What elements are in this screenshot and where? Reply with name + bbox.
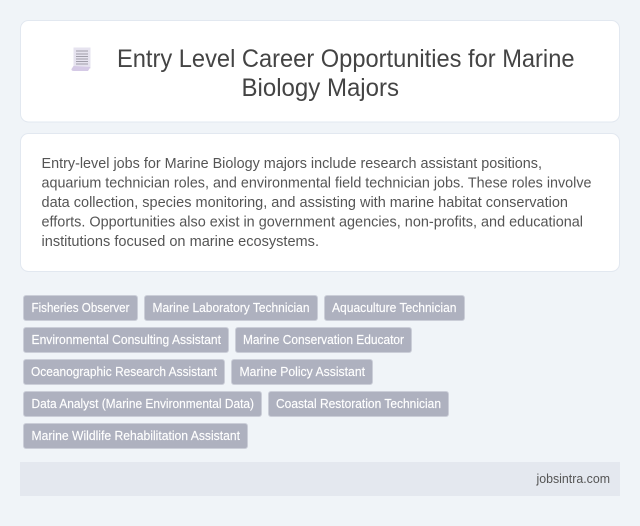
panel: header card bbox=[20, 20, 620, 122]
text block: description paragraph: Entry-level jobs for Marine Biology majors include research assistant positions, bbox=[42, 155, 542, 172]
tag: Fisheries Observer bbox=[24, 296, 138, 320]
text block: description paragraph bbox=[42, 155, 592, 250]
tag: Marine Policy Assistant: Marine Policy Assistant bbox=[240, 364, 365, 379]
tag: Marine Wildlife Rehabilitation Assistant: Marine Wildlife Rehabilitation Assistant bbox=[32, 428, 240, 443]
tag: Marine Conservation Educator: Marine Conservation Educator bbox=[243, 332, 405, 347]
tag: Oceanographic Research Assistant: Oceanographic Research Assistant bbox=[31, 364, 217, 379]
text block: description paragraph: efforts. Opportunities also exist in government agencies, non-profits, and educational bbox=[42, 214, 583, 230]
tag: Oceanographic Research Assistant bbox=[24, 360, 224, 384]
tag group: career roles bbox=[24, 296, 464, 448]
panel: description bbox=[20, 134, 620, 272]
footer bbox=[20, 462, 620, 496]
tag: Coastal Restoration Technician: Coastal Restoration Technician bbox=[276, 396, 441, 411]
tag: Environmental Consulting Assistant bbox=[24, 328, 228, 352]
footer: jobsintra.com bbox=[536, 472, 610, 486]
title: Biology Majors bbox=[242, 74, 399, 102]
title bbox=[117, 45, 574, 102]
text block: description paragraph: aquarium technician roles, and environmental field technician jobs. These roles involve bbox=[42, 174, 592, 192]
text block: description paragraph: data collection, species monitoring, and assisting with marine habitat conservation bbox=[42, 194, 568, 211]
tag: Aquaculture Technician: Aquaculture Technician bbox=[332, 300, 456, 315]
tag: Marine Wildlife Rehabilitation Assistant bbox=[24, 424, 248, 448]
tag: Marine Policy Assistant bbox=[232, 360, 372, 384]
tag: Environmental Consulting Assistant: Environmental Consulting Assistant bbox=[32, 332, 221, 347]
text block: description paragraph: institutions focused on marine ecosystems. bbox=[42, 233, 319, 250]
tag: Coastal Restoration Technician bbox=[268, 392, 448, 416]
tag: Marine Laboratory Technician: Marine Laboratory Technician bbox=[152, 300, 310, 315]
tag: Data Analyst (Marine Environmental Data) bbox=[24, 392, 262, 416]
title: Entry Level Career Opportunities for Marine bbox=[117, 45, 574, 73]
tag: Data Analyst (Marine Environmental Data): Data Analyst (Marine Environmental Data) bbox=[32, 396, 254, 411]
tag: Marine Conservation Educator bbox=[236, 328, 412, 352]
tag: Marine Laboratory Technician bbox=[144, 296, 318, 320]
tag: Aquaculture Technician bbox=[324, 296, 464, 320]
tag: Fisheries Observer: Fisheries Observer bbox=[32, 300, 130, 315]
icon: paper scroll bbox=[71, 48, 90, 71]
